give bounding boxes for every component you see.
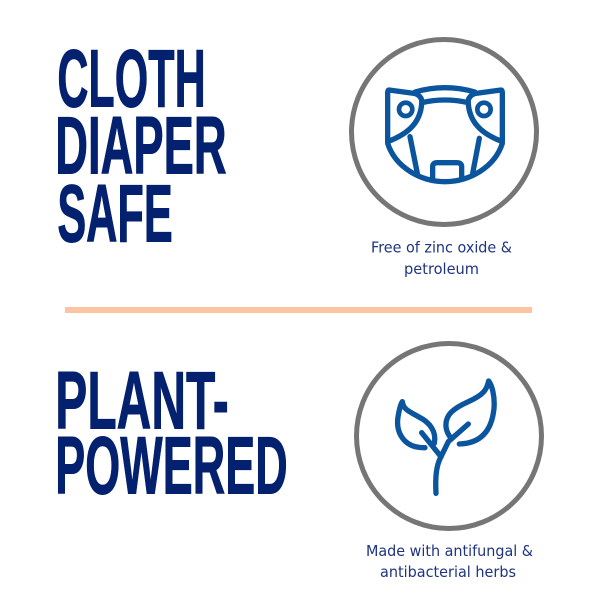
icon: sprout in circle — [356, 344, 542, 528]
caption: made with antifungal and antibacterial herbs — [366, 542, 533, 581]
caption: free of zinc oxide and petroleum: Free of zinc oxide & — [371, 238, 512, 256]
caption: free of zinc oxide and petroleum — [371, 238, 512, 278]
title: plant-powered — [55, 354, 288, 511]
title: cloth diaper safe — [55, 32, 227, 259]
caption: made with antifungal and antibacterial herbs: Made with antifungal & — [366, 542, 533, 560]
caption: made with antifungal and antibacterial herbs: antibacterial herbs — [380, 563, 516, 581]
caption: free of zinc oxide and petroleum: petroleum — [404, 260, 479, 278]
icon: diaper in circle — [352, 40, 536, 224]
